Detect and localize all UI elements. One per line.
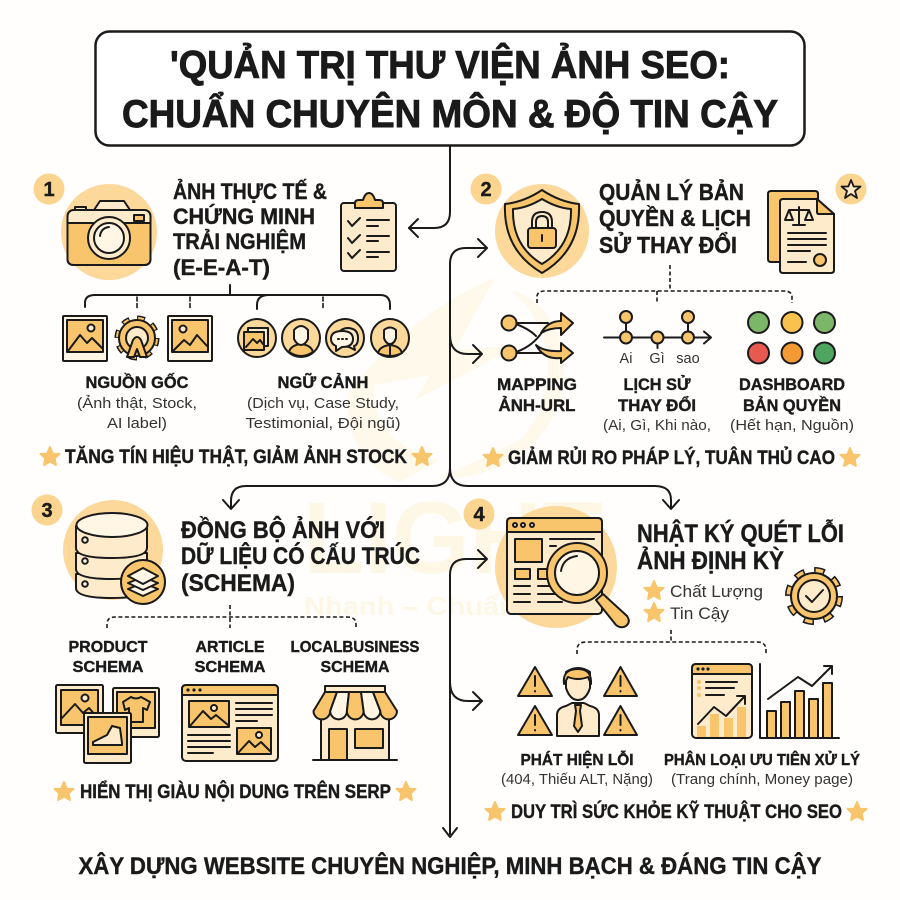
label: phân loại ưu tiên xử lý xyxy=(664,750,860,788)
icon: database with layers xyxy=(63,500,165,604)
label: article schema: SCHEMA xyxy=(194,659,266,676)
heading: QUẢN LÝ BẢN xyxy=(599,177,744,205)
heading: NHẬT KÝ QUÉT LỖI xyxy=(637,518,844,548)
label: localbusiness schema: SCHEMA xyxy=(320,659,390,676)
bracket tree xyxy=(577,630,766,654)
panel: section 2 xyxy=(470,174,866,469)
badge 1: 1 xyxy=(43,179,55,201)
panel: section 1 xyxy=(34,174,432,468)
badge 3 xyxy=(32,494,62,526)
label: dashboard: (Hết hạn, Nguồn) xyxy=(730,417,854,434)
label: mapping xyxy=(497,375,577,415)
badge 2: 2 xyxy=(480,179,492,201)
icon: camera xyxy=(61,184,157,280)
label: ngữ cảnh: Testimonial, Đội ngũ) xyxy=(246,415,401,432)
label: localbusiness schema xyxy=(290,639,420,676)
heading xyxy=(173,179,327,280)
label: phân loại ưu tiên xử lý: PHÂN LOẠI ƯU TIÊN XỬ LÝ xyxy=(664,750,860,769)
icon: clipboard checklist xyxy=(341,193,396,271)
heading: QUYỀN & LỊCH xyxy=(599,204,751,231)
arrows: main flow connectors xyxy=(223,239,679,837)
label: dashboard xyxy=(730,375,854,434)
label: lịch sử: LỊCH SỬ xyxy=(624,375,691,394)
icon: product photos xyxy=(56,685,159,763)
title xyxy=(96,32,804,146)
title: CHUẨN CHUYÊN MÔN & ĐỘ TIN CẬY xyxy=(122,91,778,136)
badge 4 xyxy=(464,498,494,530)
heading: ĐỒNG BỘ ẢNH VỚI xyxy=(181,515,385,544)
chart: change timeline: Gì xyxy=(649,351,665,367)
label: mapping: MAPPING xyxy=(497,375,577,394)
label: nguồn gốc: AI label) xyxy=(107,415,167,432)
watermark: logo and brand: LIGHT xyxy=(303,481,603,595)
icon: shield with padlock xyxy=(495,184,589,278)
list: quality and trust: Chất Lượng xyxy=(670,582,763,601)
heading: SỬ THAY ĐỔI xyxy=(599,230,737,258)
panel: section 3 xyxy=(32,494,420,803)
list: quality and trust: Tin Cậy xyxy=(670,604,729,623)
label: article schema xyxy=(194,639,266,676)
label: phát hiện lỗi: (404, Thiếu ALT, Nặng) xyxy=(501,772,653,788)
bracket tree xyxy=(537,265,792,304)
label: article schema: ARTICLE xyxy=(196,639,265,656)
label: phát hiện lỗi: PHÁT HIỆN LỖI xyxy=(520,750,634,769)
badge 2 xyxy=(470,174,502,204)
label: ngữ cảnh: NGỮ CẢNH xyxy=(278,372,368,392)
icon: star badge xyxy=(836,174,866,204)
chart: change timeline: Ai xyxy=(620,351,632,367)
label: dashboard: DASHBOARD xyxy=(739,375,845,394)
label: product schema: SCHEMA xyxy=(72,659,144,676)
icon: article window xyxy=(182,685,278,761)
heading xyxy=(637,518,844,575)
icon: person with warnings xyxy=(518,667,637,736)
label: product schema: PRODUCT xyxy=(68,639,148,656)
label: lịch sử: (Ai, Gì, Khi nào, xyxy=(603,417,711,434)
bracket tree xyxy=(107,605,356,628)
chart: rising bars xyxy=(760,664,839,738)
icon: mapping arrows xyxy=(502,313,573,363)
heading: CHỨNG MINH xyxy=(173,204,315,229)
list: quality and trust xyxy=(644,581,763,623)
takeaway 1: TĂNG TÍN HIỆU THẬT, GIẢM ẢNH STOCK xyxy=(65,446,407,468)
heading xyxy=(599,177,751,258)
label: nguồn gốc xyxy=(77,372,197,432)
icons: source images xyxy=(63,316,212,361)
label: product schema xyxy=(68,639,148,676)
badge 3: 3 xyxy=(41,500,53,522)
heading: ẢNH ĐỊNH KỲ xyxy=(637,545,784,575)
footer conclusion: XÂY DỰNG WEBSITE CHUYÊN NGHIỆP, MINH BẠCH & ĐÁNG TIN CẬY xyxy=(78,852,822,880)
takeaway 4: DUY TRÌ SỨC KHỎE KỸ THUẬT CHO SEO xyxy=(511,801,842,823)
chart: change timeline xyxy=(604,311,711,367)
icon: browser with magnifier xyxy=(495,506,629,628)
heading: (E-E-A-T) xyxy=(173,255,270,280)
label: ngữ cảnh xyxy=(246,372,401,432)
label: mapping: ẢNH-URL xyxy=(498,396,576,415)
label: ngữ cảnh: (Dịch vụ, Case Study, xyxy=(247,395,399,412)
takeaway 3: HIỂN THỊ GIÀU NỘI DUNG TRÊN SERP xyxy=(80,781,391,803)
heading: (SCHEMA) xyxy=(181,570,295,597)
watermark: logo and brand xyxy=(303,278,604,621)
label: phân loại ưu tiên xử lý: (Trang chính, Money page) xyxy=(671,772,853,788)
arrow: title to section 1 xyxy=(409,146,450,237)
icons: context circles xyxy=(238,319,409,357)
heading: DỮ LIỆU CÓ CẤU TRÚC xyxy=(181,542,420,570)
icon: legal document xyxy=(768,191,834,273)
label: dashboard: BẢN QUYỀN xyxy=(743,396,841,415)
label: lịch sử xyxy=(603,375,711,434)
label: nguồn gốc: (Ảnh thật, Stock, xyxy=(77,395,197,412)
label: localbusiness schema: LOCALBUSINESS xyxy=(290,639,420,656)
icon: gear with check xyxy=(790,572,838,620)
watermark: logo and brand: Nhanh – Chuẩn – Đẹp xyxy=(304,591,604,621)
chart: change timeline: sao xyxy=(676,351,700,367)
icon: status dots dashboard xyxy=(748,312,835,364)
title: 'QUẢN TRỊ THƯ VIỆN ẢNH SEO: xyxy=(170,43,730,87)
label: nguồn gốc: NGUỒN GỐC xyxy=(86,372,189,392)
label: lịch sử: THAY ĐỔI xyxy=(618,396,696,415)
panel: section 4 xyxy=(464,498,866,823)
bracket tree xyxy=(85,285,390,309)
badge 1 xyxy=(34,174,64,204)
heading xyxy=(181,515,420,597)
icon: window with trend chart xyxy=(692,664,752,738)
icon: storefront xyxy=(313,686,397,760)
heading: ẢNH THỰC TẾ & xyxy=(173,179,327,204)
heading: TRẢI NGHIỆM xyxy=(173,229,306,254)
takeaway 2: GIẢM RỦI RO PHÁP LÝ, TUÂN THỦ CAO xyxy=(508,447,835,469)
label: phát hiện lỗi xyxy=(501,750,653,788)
badge 4: 4 xyxy=(473,504,485,526)
